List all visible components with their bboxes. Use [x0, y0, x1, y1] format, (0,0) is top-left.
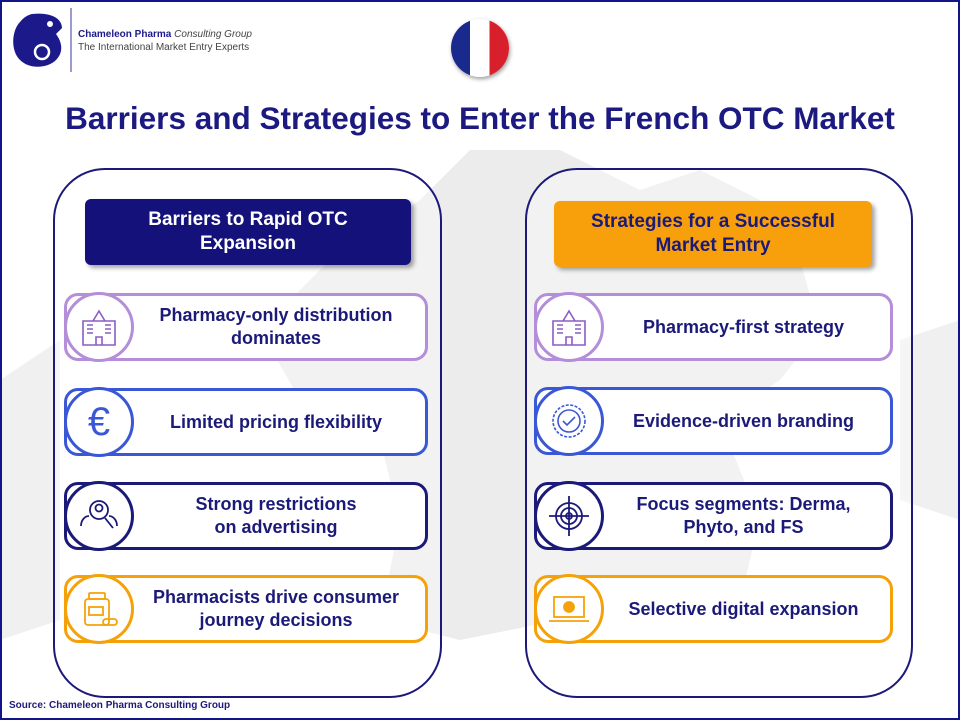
card: pharmacists	[64, 575, 428, 643]
card: focus: Focus segments: Derma,	[636, 494, 851, 514]
card: advertising: on advertising	[214, 517, 338, 537]
panel: strategies	[525, 168, 913, 698]
card: pricing	[64, 388, 428, 456]
company name	[78, 29, 252, 53]
card: pharmacy-only	[64, 293, 428, 361]
heading: strategies	[554, 201, 872, 267]
card: pharmacists: Pharmacists drive consumer	[153, 587, 399, 607]
card: pharmacy-only: Pharmacy-only distribution	[159, 305, 393, 325]
panel: barriers	[53, 168, 442, 698]
card: focus: Phyto, and FS	[683, 517, 804, 537]
heading: barriers: Expansion	[200, 233, 296, 254]
source: Source: Chameleon Pharma Consulting Group	[9, 700, 230, 711]
card: advertising	[64, 482, 428, 550]
card: evidence	[534, 387, 893, 455]
card: pricing: Limited pricing flexibility	[170, 412, 382, 432]
card: pharmacists: journey decisions	[199, 610, 353, 630]
heading: barriers	[85, 199, 411, 265]
company name: The International Market Entry Experts	[78, 42, 249, 53]
heading: strategies: Strategies for a Successful	[591, 211, 835, 232]
icon: chameleon	[13, 14, 62, 67]
logo	[13, 8, 252, 72]
card: digital: Selective digital expansion	[628, 598, 859, 618]
card: pharmacy-first	[534, 293, 893, 361]
card: evidence: Evidence-driven branding	[633, 410, 854, 430]
title: Barriers and Strategies to Enter the French OTC Market	[65, 100, 895, 136]
card: pharmacy-only: dominates	[231, 328, 321, 348]
heading: barriers: Barriers to Rapid OTC	[148, 209, 348, 230]
card: pharmacy-first: Pharmacy-first strategy	[643, 316, 844, 336]
card: digital	[534, 575, 893, 643]
icon: French flag	[451, 19, 509, 77]
card: pricing: €	[88, 400, 110, 444]
card: advertising: Strong restrictions	[195, 494, 357, 514]
heading: strategies: Market Entry	[655, 235, 771, 256]
company name: Chameleon Pharma Consulting Group	[78, 29, 252, 40]
card: focus	[534, 482, 893, 550]
